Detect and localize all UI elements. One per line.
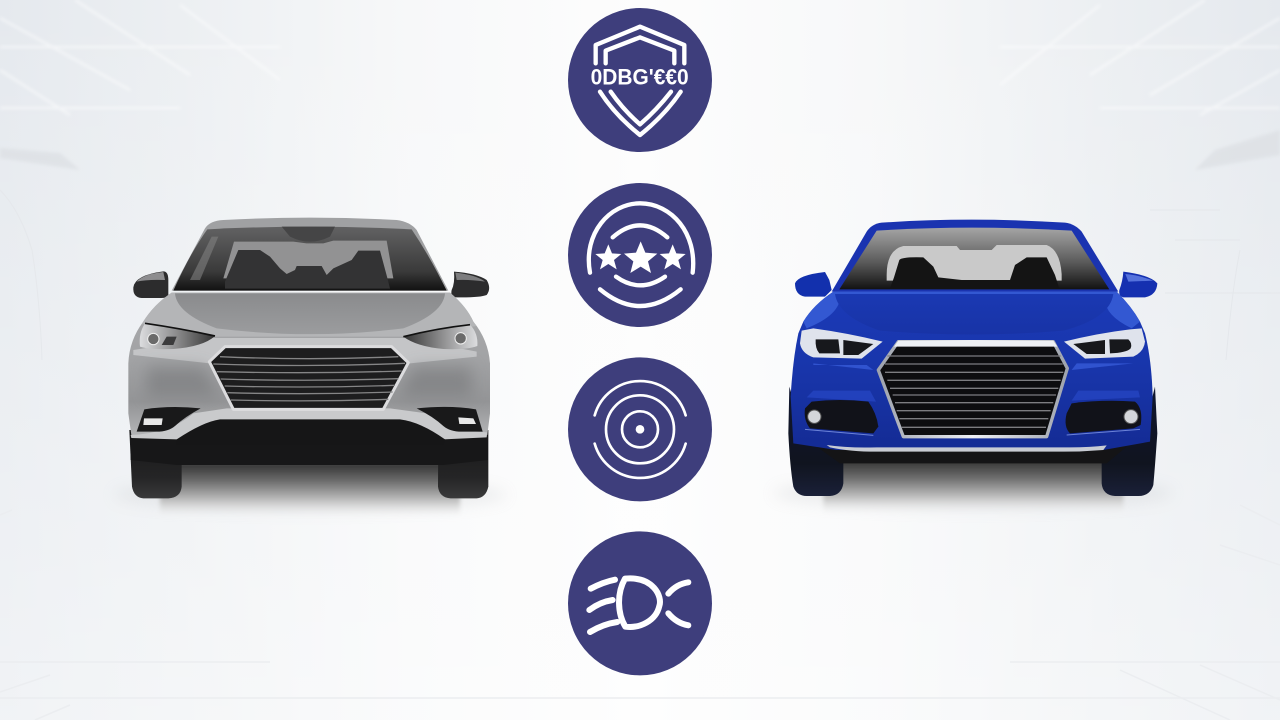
gray car grille: [209, 347, 408, 409]
gray car roof: [172, 218, 448, 291]
icon: concentric rings: [568, 357, 712, 501]
gray car body: [128, 293, 490, 438]
gray car wheels: [129, 430, 488, 498]
gray car ground shadow: [113, 462, 507, 518]
blue car wheels: [788, 387, 1157, 496]
gray car mirrors: [133, 271, 489, 298]
blue car fog lamps: [805, 400, 1141, 435]
blue car body: [791, 292, 1153, 450]
icon: three star rating: [568, 183, 712, 327]
icon: shield badge: 0DBG'€€0: [591, 65, 689, 90]
blue car grille: [878, 341, 1067, 437]
blue car hood: [803, 292, 1140, 402]
icon: shield badge: [568, 8, 712, 152]
blue car headlights: [800, 328, 1145, 359]
blue car chrome strip: [827, 445, 1107, 452]
gray car side panels: [147, 367, 472, 397]
blue car windshield: [839, 228, 1109, 289]
blue car underbody: [817, 447, 1127, 463]
gray car hood: [133, 293, 477, 363]
blue car: [773, 220, 1173, 515]
gray car headlights: [140, 323, 477, 349]
gray car: [113, 218, 507, 518]
gray car windshield: [173, 227, 447, 291]
icon: headlamp: [568, 531, 712, 675]
blue car ground shadow: [773, 458, 1173, 515]
blue car mirrors: [795, 272, 1157, 297]
gray car lower bumper: [131, 407, 487, 445]
gray car underbody: [131, 433, 488, 465]
blue car roof: [832, 220, 1118, 292]
